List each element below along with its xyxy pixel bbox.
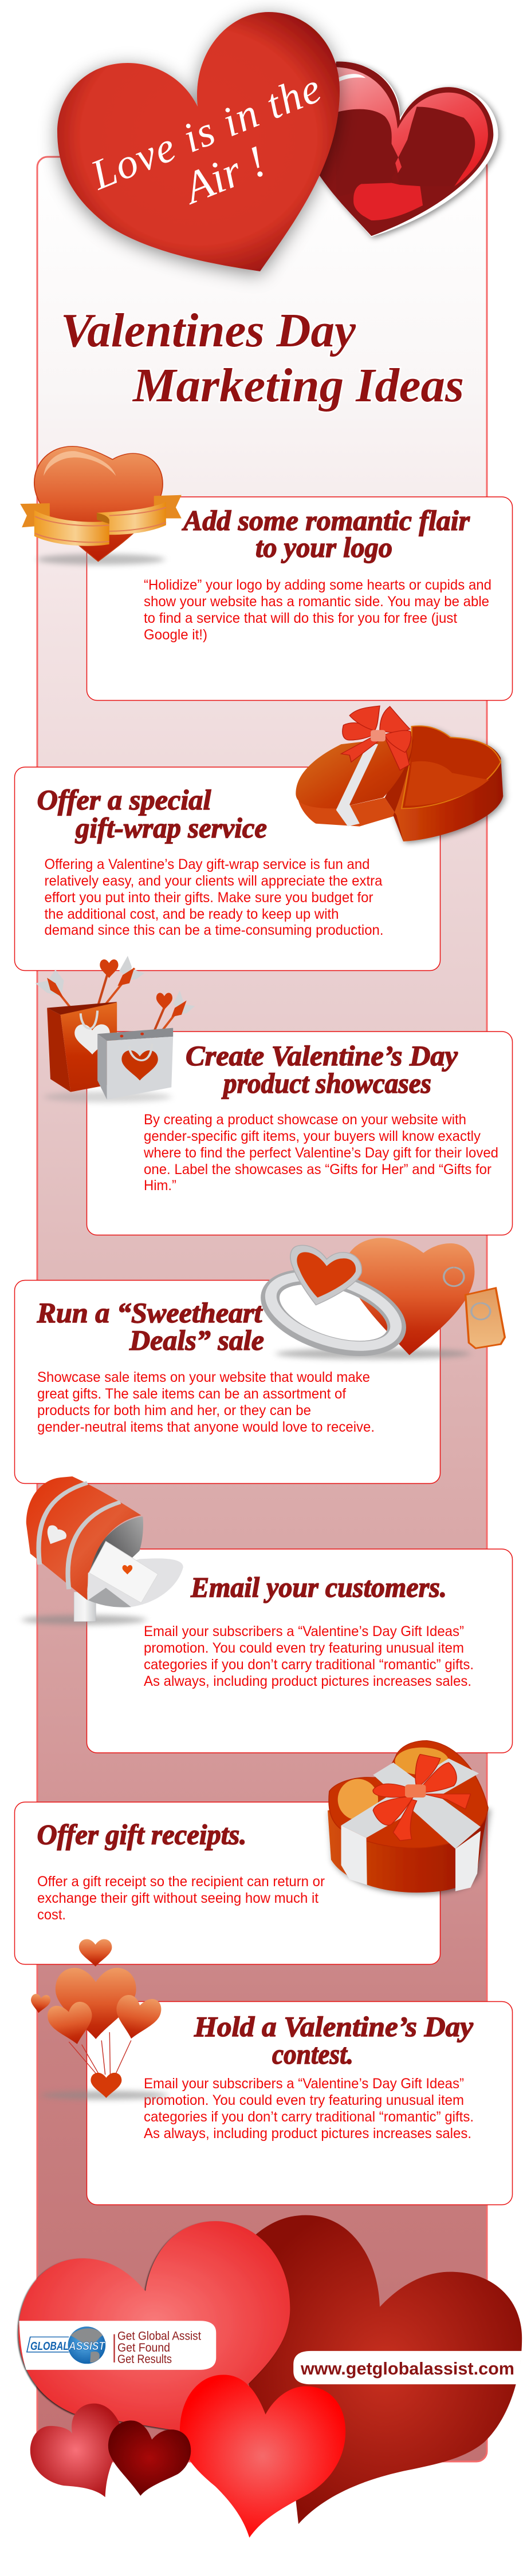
- card 3 body text: gender-specific gift items, your buyers will know exactly: [144, 1128, 481, 1144]
- card 1 body text: show your website has a romantic side. You may be able: [144, 594, 489, 610]
- big dark heart: [249, 2215, 522, 2524]
- card 7 body text: categories if you don’t carry traditional “romantic” gifts.: [144, 2109, 474, 2125]
- card 7 body text: Email your subscribers a “Valentine’s Day Gift Ideas”: [144, 2076, 464, 2092]
- card 4: sweetheart deals: [15, 1280, 440, 1484]
- card 3 body text: [143, 1112, 498, 1194]
- card 4 body text: gender-neutral items that anyone would love to receive.: [37, 1419, 375, 1435]
- card 2 body text: effort you put into their gifts. Make sure you budget for: [45, 890, 373, 906]
- card 3 body text: By creating a product showcase on your website with: [144, 1112, 466, 1128]
- divider: [113, 2334, 115, 2362]
- card 3 body text: where to find the perfect Valentine’s Day gift for their loved: [143, 1145, 498, 1161]
- website url: www.getglobalassist.com: [300, 2358, 514, 2379]
- logo wordmark: ASSIST: [68, 2340, 106, 2353]
- card 6 heading: Offer gift receipts.: [37, 1818, 246, 1850]
- icon: closed heart gift box with bow: [328, 1741, 488, 1893]
- card 1 body text: [144, 577, 491, 643]
- card 4 heading: [36, 1297, 264, 1356]
- small dark heart: [108, 2420, 191, 2496]
- logo wordmark: [30, 2340, 106, 2353]
- card 2: gift wrap: [15, 767, 440, 971]
- card 1 body text: “Holidize” your logo by adding some hearts or cupids and: [144, 577, 491, 593]
- card 6: gift receipts: [15, 1802, 440, 1965]
- logo tagline: [117, 2330, 201, 2366]
- card 5 body text: Email your subscribers a “Valentine’s Day Gift Ideas”: [144, 1623, 464, 1639]
- card 1: logo flair: [87, 497, 512, 701]
- card 2 heading: Offer a special: [37, 784, 211, 816]
- url bar background: [293, 2351, 522, 2384]
- bright red heart: [180, 2374, 345, 2538]
- icon: ring with heart and tag: [257, 1238, 505, 1363]
- card 7 body text: [144, 2076, 474, 2142]
- title: Marketing Ideas: [132, 359, 464, 412]
- globe: [68, 2326, 105, 2364]
- grey bag: [97, 1028, 173, 1100]
- card 5 heading: Email your customers.: [190, 1571, 447, 1603]
- heart headline: Air !: [174, 136, 273, 214]
- card 5 body text: As always, including product pictures increases sales.: [144, 1673, 471, 1689]
- card 3: product showcases: [87, 1032, 512, 1235]
- logo tagline: Get Global Assist: [117, 2330, 201, 2342]
- logo box outline: [27, 2337, 69, 2352]
- card 4 body text: Showcase sale items on your website that would make: [37, 1369, 370, 1385]
- card 7 body text: As always, including product pictures increases sales.: [144, 2125, 471, 2142]
- card 7 heading: contest.: [272, 2038, 353, 2070]
- card 7 heading: [194, 2010, 474, 2070]
- arrows: [36, 956, 195, 1038]
- card 6 body text: [37, 1874, 325, 1923]
- card 3 heading: product showcases: [221, 1067, 431, 1099]
- card 3 heading: Create Valentine’s Day: [186, 1040, 458, 1072]
- card 1 body text: Google it!): [144, 627, 207, 643]
- card 4 body text: great gifts. The sale items can be an assortment of: [37, 1386, 346, 1402]
- card 3 body text: one. Label the showcases as “Gifts for Her” and “Gifts for: [144, 1161, 491, 1178]
- card 6 body text: Offer a gift receipt so the recipient can return or: [37, 1874, 325, 1890]
- icon: mailbox with letter: [22, 1476, 183, 1625]
- orange bag: [47, 1002, 117, 1092]
- card 5: email customers: [87, 1549, 512, 1753]
- card 4 heading: Run a “Sweetheart: [36, 1297, 264, 1329]
- card 4 heading: Deals” sale: [129, 1324, 264, 1356]
- card 2 body text: relatively easy, and your clients will appreciate the extra: [45, 873, 383, 889]
- logo tagline: Get Found: [117, 2341, 170, 2354]
- card 6 body text: exchange their gift without seeing how much it: [37, 1890, 318, 1906]
- logo bar background: [19, 2321, 216, 2370]
- card 3 body text: Him.”: [144, 1178, 176, 1194]
- card 2 heading: gift-wrap service: [75, 812, 267, 844]
- title: [61, 304, 464, 412]
- card 1 body text: to find a service that will do this for you for free (just: [144, 610, 457, 626]
- card 2 body text: demand since this can be a time-consuming production.: [45, 922, 384, 938]
- logo tagline: Get Results: [117, 2353, 172, 2366]
- small rose heart: [30, 2404, 121, 2497]
- card 5 body text: categories if you don’t carry traditional “romantic” gifts.: [144, 1657, 474, 1673]
- icon: heart balloons: [29, 1939, 168, 2100]
- price tag: [444, 1267, 505, 1348]
- balloon strings: [69, 2032, 131, 2075]
- card 2 heading: [37, 784, 267, 844]
- card 2 body text: Offering a Valentine’s Day gift-wrap service is fun and: [45, 856, 370, 872]
- card 2 body text: the additional cost, and be ready to keep up with: [45, 906, 339, 922]
- card 6 body text: cost.: [37, 1907, 66, 1923]
- icon: shopping bags with arrows: [36, 956, 195, 1103]
- card 3 heading: [186, 1040, 458, 1099]
- card 7 body text: promotion. You could even try featuring unusual item: [144, 2092, 464, 2108]
- card 1 heading: to your logo: [255, 531, 392, 563]
- card 1 heading: Add some romantic flair: [182, 504, 470, 536]
- heart headline: Love is in the: [84, 65, 327, 199]
- card 4 body text: products for both him and her, or they can be: [37, 1402, 311, 1419]
- pink heart: [18, 2221, 290, 2431]
- card 4 body text: [37, 1369, 375, 1435]
- card 5 body text: promotion. You could even try featuring unusual item: [144, 1640, 464, 1656]
- icon: heart with gold ribbon: [20, 447, 182, 565]
- icon: big red heart: [57, 12, 340, 271]
- card 5 body text: [144, 1623, 474, 1689]
- background panel: [37, 157, 487, 2462]
- card 7 heading: Hold a Valentine’s Day: [194, 2010, 474, 2042]
- card 7: contest: [87, 2001, 512, 2205]
- title: Valentines Day: [61, 304, 356, 357]
- card 1 heading: [182, 504, 470, 563]
- footer hearts: [18, 2215, 522, 2538]
- logo wordmark: GLOBAL: [30, 2340, 69, 2353]
- card 2 body text: [45, 856, 384, 938]
- icon: open heart gift box: [296, 706, 503, 841]
- icon: kissing couple glossy heart: [319, 62, 498, 237]
